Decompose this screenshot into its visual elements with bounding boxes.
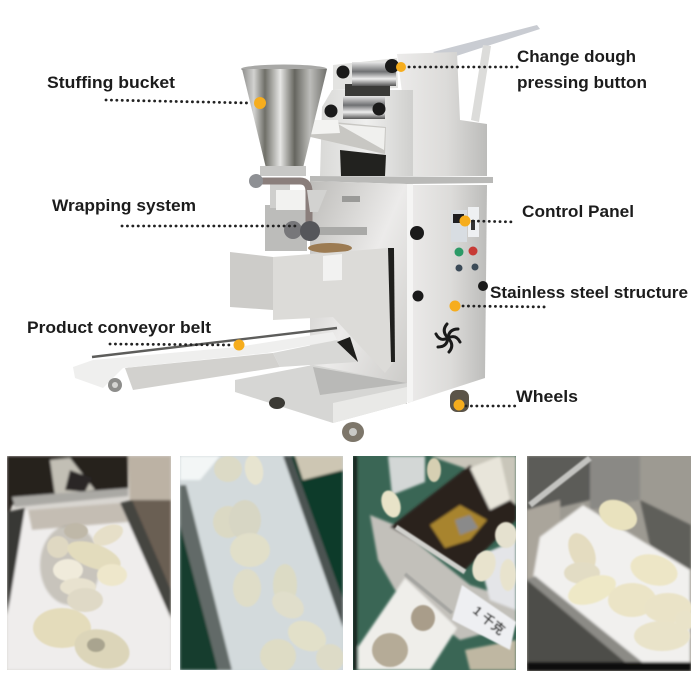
callout: change dough pressing button bbox=[396, 47, 647, 92]
photo: dumplings on belt bbox=[180, 454, 344, 673]
callout: wheels: Wheels bbox=[516, 387, 578, 406]
photo: dumplings leaving machine bbox=[7, 456, 171, 675]
dough chute bbox=[290, 118, 386, 154]
cabinet side bbox=[408, 185, 487, 403]
callout: wrapping system: Wrapping system bbox=[52, 196, 196, 215]
cabinet front bbox=[310, 181, 407, 404]
control panel bbox=[451, 207, 479, 272]
hopper bbox=[241, 64, 327, 176]
callout: wheels bbox=[454, 387, 578, 410]
callout: product conveyor belt: Product conveyor belt bbox=[27, 318, 211, 337]
callout: change dough pressing button: pressing button bbox=[517, 73, 647, 92]
callout: control panel: Control Panel bbox=[522, 202, 634, 221]
callout: product conveyor belt bbox=[27, 318, 244, 350]
left box bbox=[230, 252, 273, 310]
callout: stainless steel structure bbox=[450, 283, 688, 312]
top plate bbox=[310, 176, 493, 184]
photo: wrapping head close-up: 1 千克 bbox=[470, 603, 508, 638]
callout: control panel bbox=[460, 202, 634, 226]
callout: stainless steel structure: Stainless steel structure bbox=[490, 283, 688, 302]
rollers bbox=[343, 62, 396, 119]
machine illustration bbox=[73, 25, 540, 442]
base tray bbox=[235, 365, 407, 423]
wrapping system bbox=[249, 174, 367, 253]
front chute cover bbox=[273, 248, 395, 373]
dark space under chute bbox=[340, 150, 386, 176]
knobs top bbox=[324, 59, 399, 118]
cabinet knobs bbox=[410, 226, 488, 302]
photo: dumplings on white conveyor bbox=[527, 456, 695, 671]
callout: stuffing bucket bbox=[47, 73, 266, 109]
upper tower body bbox=[320, 52, 487, 176]
photo: wrapping head close-up bbox=[353, 456, 517, 670]
arm: top right lever bbox=[433, 25, 540, 122]
conveyor belt bbox=[73, 328, 358, 392]
callout: stuffing bucket: Stuffing bucket bbox=[47, 73, 175, 92]
callout: change dough pressing button: Change dough bbox=[517, 47, 636, 66]
icon: ventilation fan bbox=[436, 324, 460, 352]
wheels bbox=[269, 390, 469, 442]
